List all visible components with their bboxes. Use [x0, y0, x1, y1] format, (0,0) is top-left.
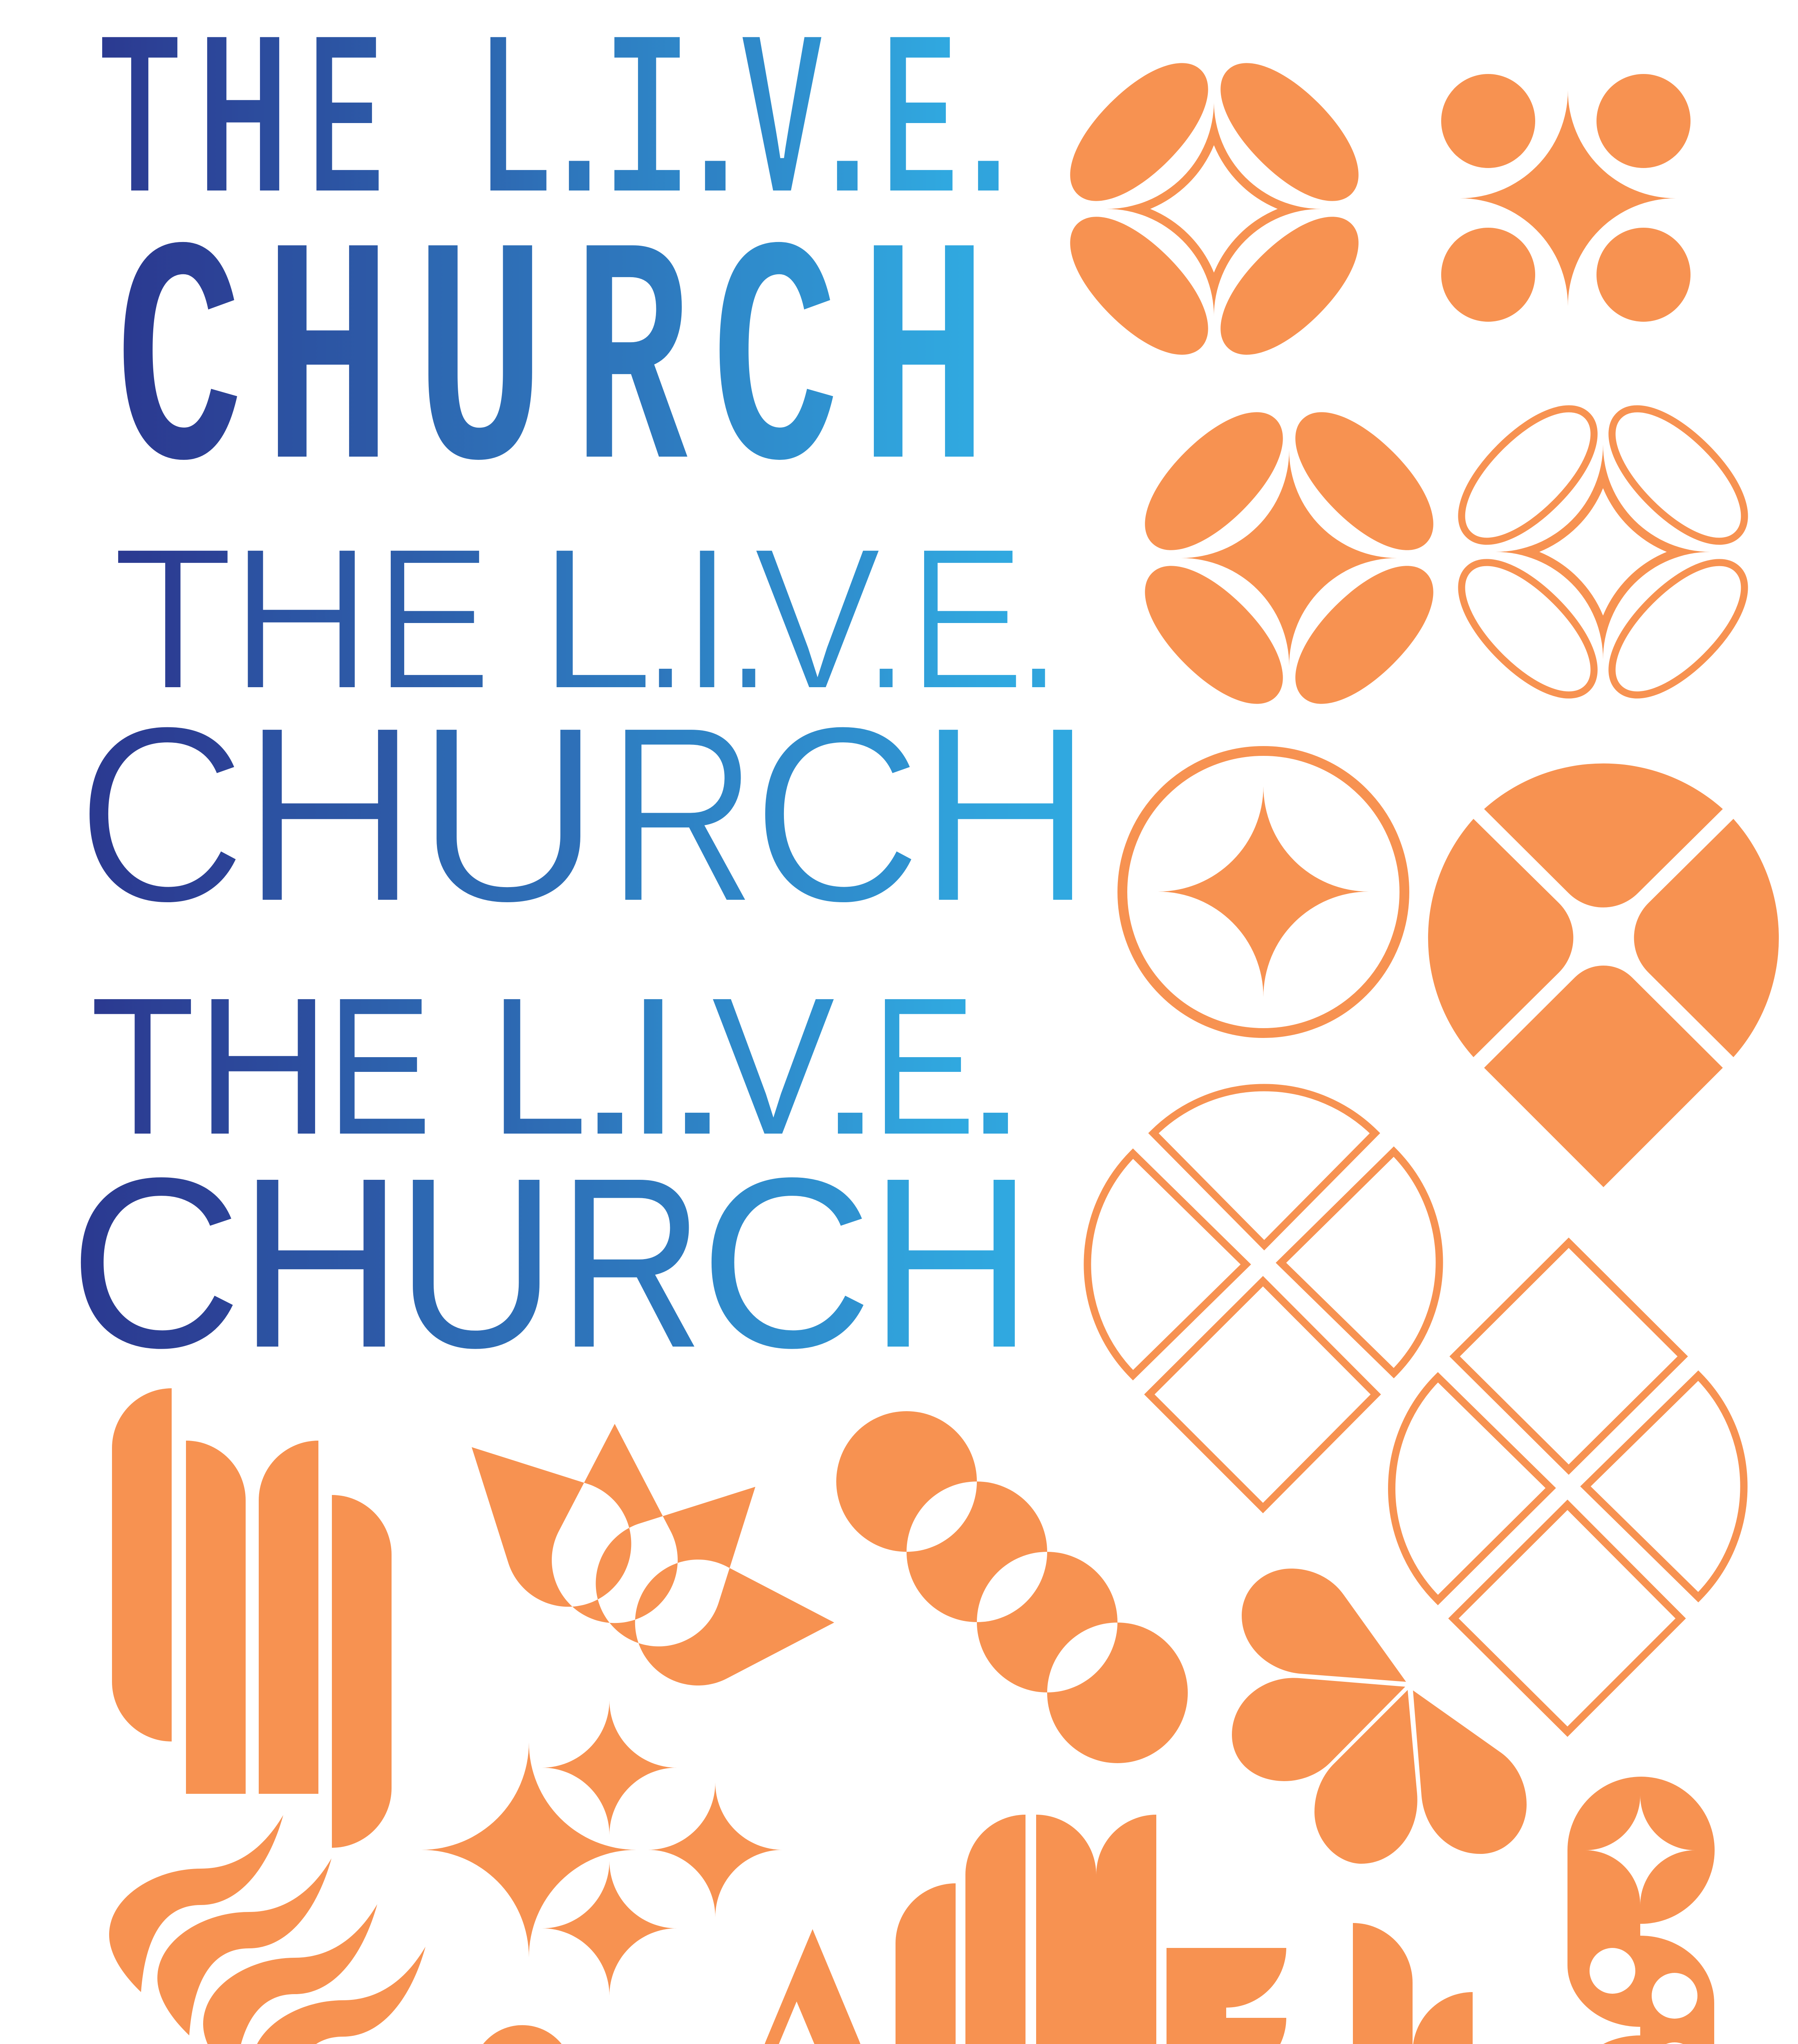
title: light wordmark CHURCH: H [240, 672, 419, 955]
icon: chain of upward drops [718, 1929, 863, 2044]
title: regular wordmark THE L.I.V.E.: E [872, 957, 975, 1175]
title: regular wordmark THE L.I.V.E.: E [327, 957, 432, 1175]
icon: star circle with holes body [1567, 1777, 1715, 2044]
icon: star with four circles [1441, 74, 1691, 322]
title: regular wordmark CHURCH: U [396, 1127, 557, 1398]
title: regular wordmark CHURCH: H [238, 1127, 403, 1398]
title: light wordmark THE L.I.V.E. [112, 505, 1061, 732]
title: regular wordmark CHURCH: R [558, 1128, 704, 1398]
title: light wordmark THE L.I.V.E.: I [681, 505, 733, 732]
icon: ring with star [1122, 751, 1404, 1033]
title: condensed wordmark CHURCH: H [857, 186, 990, 558]
title: light wordmark THE L.I.V.E.: . [726, 506, 771, 732]
icon: outlined star with four solid petals [1048, 41, 1380, 377]
title: condensed wordmark CHURCH: H [261, 186, 394, 558]
icon: solid star with four petals [1123, 390, 1455, 726]
title: condensed wordmark THE L.I.V.E. [96, 0, 1042, 267]
title: condensed wordmark CHURCH: C [710, 186, 841, 558]
title: light wordmark THE L.I.V.E.: . [864, 506, 909, 732]
title: light wordmark THE L.I.V.E.: H [230, 505, 372, 732]
icon: overlapping teardrop burst [472, 1424, 834, 1685]
title: light wordmark THE L.I.V.E.: E [908, 505, 1025, 732]
title: regular wordmark CHURCH: H [869, 1127, 1033, 1398]
title: regular wordmark THE L.I.V.E.: I [626, 957, 680, 1175]
icon: LIVE letterforms [896, 1815, 1286, 2044]
icon: two pairs of overlapping downward drops [456, 2025, 674, 2044]
title: regular wordmark THE L.I.V.E.: V [712, 957, 835, 1175]
icon: interlocking bars [1353, 1923, 1473, 2044]
title: regular wordmark CHURCH: C [699, 1127, 873, 1399]
title: regular wordmark THE L.I.V.E.: . [574, 957, 646, 1175]
icon: four flames [109, 1815, 425, 2044]
icon: overlapping circle chain [836, 1411, 1188, 1763]
title: light wordmark CHURCH: H [917, 673, 1094, 956]
title: light wordmark CHURCH [76, 672, 1094, 956]
title: regular wordmark THE L.I.V.E.: L [489, 957, 587, 1175]
title: regular wordmark THE L.I.V.E.: H [196, 957, 330, 1175]
title: regular wordmark CHURCH: C [69, 1127, 242, 1399]
title: regular wordmark THE L.I.V.E.: T [90, 957, 195, 1175]
title: condensed wordmark CHURCH: C [114, 186, 245, 558]
icon: outlined four-part heart [1087, 1087, 1440, 1508]
title: light wordmark CHURCH: U [414, 673, 602, 956]
icon: solid four-part heart [1428, 763, 1779, 1187]
title: light wordmark CHURCH: C [76, 673, 247, 956]
title: condensed wordmark CHURCH: R [572, 186, 692, 558]
icon: four vertical bars [112, 1388, 392, 1848]
title: regular wordmark CHURCH [69, 1127, 1033, 1399]
title: regular wordmark THE L.I.V.E. [90, 957, 1032, 1175]
title: light wordmark THE L.I.V.E.: . [1016, 506, 1061, 732]
icon: outlined star and four outlined petals [1441, 388, 1765, 716]
title: regular wordmark THE L.I.V.E.: . [661, 957, 733, 1175]
title: light wordmark THE L.I.V.E.: L [538, 505, 654, 732]
icon: outlined diamond and lens cross [1392, 1243, 1744, 1732]
title: regular wordmark THE L.I.V.E.: . [814, 957, 886, 1175]
title: condensed wordmark CHURCH: U [412, 186, 548, 558]
title: light wordmark CHURCH: C [751, 673, 923, 956]
title: light wordmark THE L.I.V.E.: E [375, 505, 492, 732]
title: condensed wordmark THE L.I.V.E.: T [96, 0, 184, 267]
title: light wordmark THE L.I.V.E.: V [753, 505, 883, 732]
title: regular wordmark THE L.I.V.E.: . [960, 957, 1032, 1175]
title: condensed wordmark THE L.I.V.E.: L [475, 0, 555, 267]
icon: teardrop flower [1232, 1569, 1527, 1864]
title: condensed wordmark THE L.I.V.E.: H [194, 0, 293, 267]
title: light wordmark THE L.I.V.E.: T [112, 506, 234, 732]
title: light wordmark THE L.I.V.E.: . [643, 506, 688, 732]
icon: cluster of four stars [421, 1700, 783, 1996]
title: light wordmark CHURCH: R [606, 673, 758, 956]
title: condensed wordmark CHURCH [114, 186, 990, 558]
